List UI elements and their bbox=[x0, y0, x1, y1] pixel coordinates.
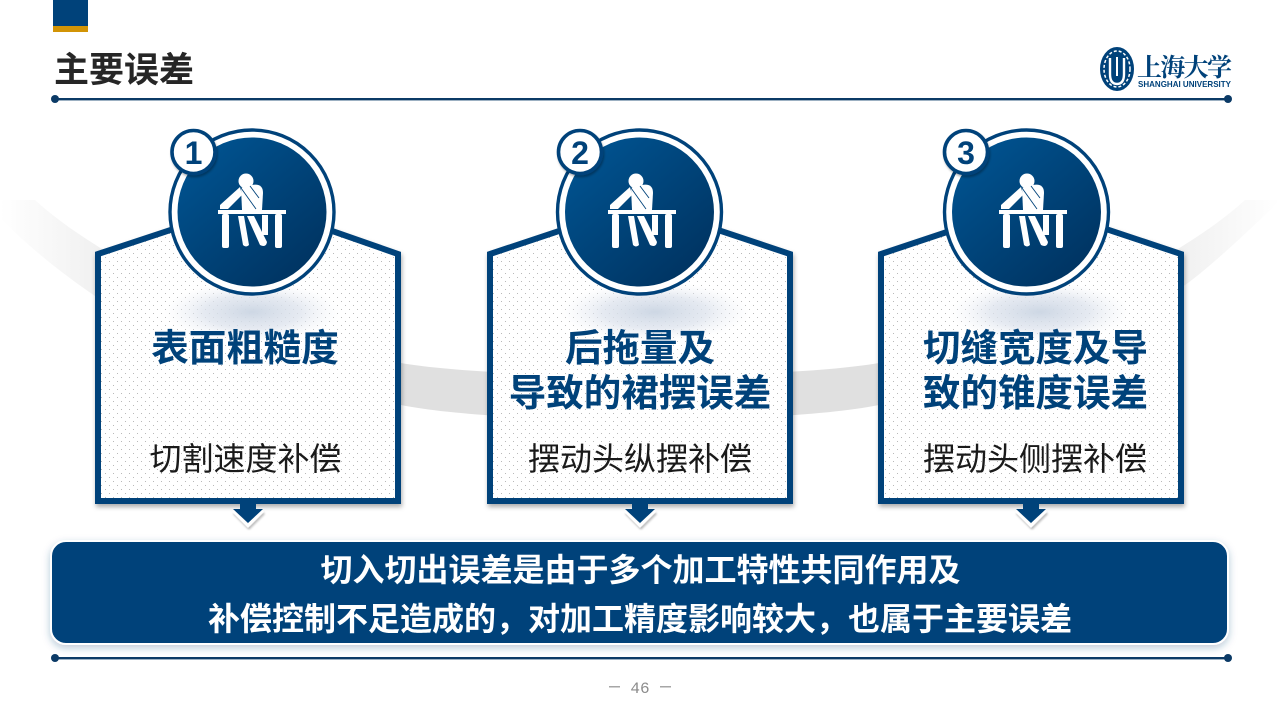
banner line 2: 补偿控制不足造成的，对加工精度影响较大，也属于主要误差 bbox=[208, 601, 1072, 637]
arrow 2 bbox=[625, 504, 655, 526]
logo: Shanghai University: 上海大学 bbox=[1137, 48, 1232, 84]
title: 主要误差 bbox=[54, 51, 194, 90]
icon circle 2 bbox=[558, 130, 722, 294]
card 3 outline bbox=[881, 204, 1181, 501]
card 2 glow bbox=[560, 282, 750, 342]
panel: trailing lag and skirt error bbox=[490, 130, 790, 526]
number badge 2 bbox=[558, 130, 602, 174]
number badge 1 bbox=[172, 130, 215, 174]
card 3 heading: 切缝宽度及导 bbox=[923, 327, 1148, 369]
card 1 outline bbox=[98, 203, 398, 501]
card 2 heading: 后拖量及 bbox=[565, 327, 715, 369]
arrow 3 bbox=[1016, 504, 1046, 526]
card 1 heading: 表面粗糙度 bbox=[151, 327, 339, 369]
arrow 1 bbox=[233, 504, 263, 526]
icon circle 3 bbox=[944, 130, 1108, 294]
bottom divider bbox=[51, 654, 1232, 662]
card 2 subtext: 摆动头纵摆补偿 bbox=[528, 441, 752, 477]
card 2 outline bbox=[490, 204, 790, 501]
card 1 subtext: 切割速度补偿 bbox=[149, 441, 342, 477]
icon circle 1 bbox=[170, 130, 334, 294]
card 3 glow bbox=[950, 282, 1130, 342]
card 1 glow bbox=[164, 282, 340, 342]
top divider bbox=[51, 95, 1232, 103]
card 2 heading line 2: 导致的裙摆误差 bbox=[509, 372, 771, 414]
number badge 2: 2 bbox=[571, 135, 589, 171]
card 3 heading line 2: 致的锥度误差 bbox=[923, 372, 1148, 414]
logo: Shanghai University bbox=[1100, 47, 1232, 91]
header accent block bbox=[53, 0, 88, 32]
background swoosh bbox=[0, 200, 1280, 420]
banner line 1: 切入切出误差是由于多个加工特性共同作用及 bbox=[320, 552, 961, 588]
logo: Shanghai University: SHANGHAI UNIVERSITY bbox=[1138, 79, 1231, 89]
page number: 46 bbox=[630, 680, 650, 698]
number badge 3 bbox=[944, 130, 988, 174]
conclusion banner bbox=[51, 541, 1228, 644]
number badge 1: 1 bbox=[185, 135, 202, 171]
page number bbox=[609, 680, 671, 698]
number badge 3: 3 bbox=[957, 135, 975, 171]
panel: kerf width and taper error bbox=[881, 130, 1181, 526]
card 3 subtext: 摆动头侧摆补偿 bbox=[923, 441, 1147, 477]
panel: surface roughness bbox=[98, 130, 398, 526]
